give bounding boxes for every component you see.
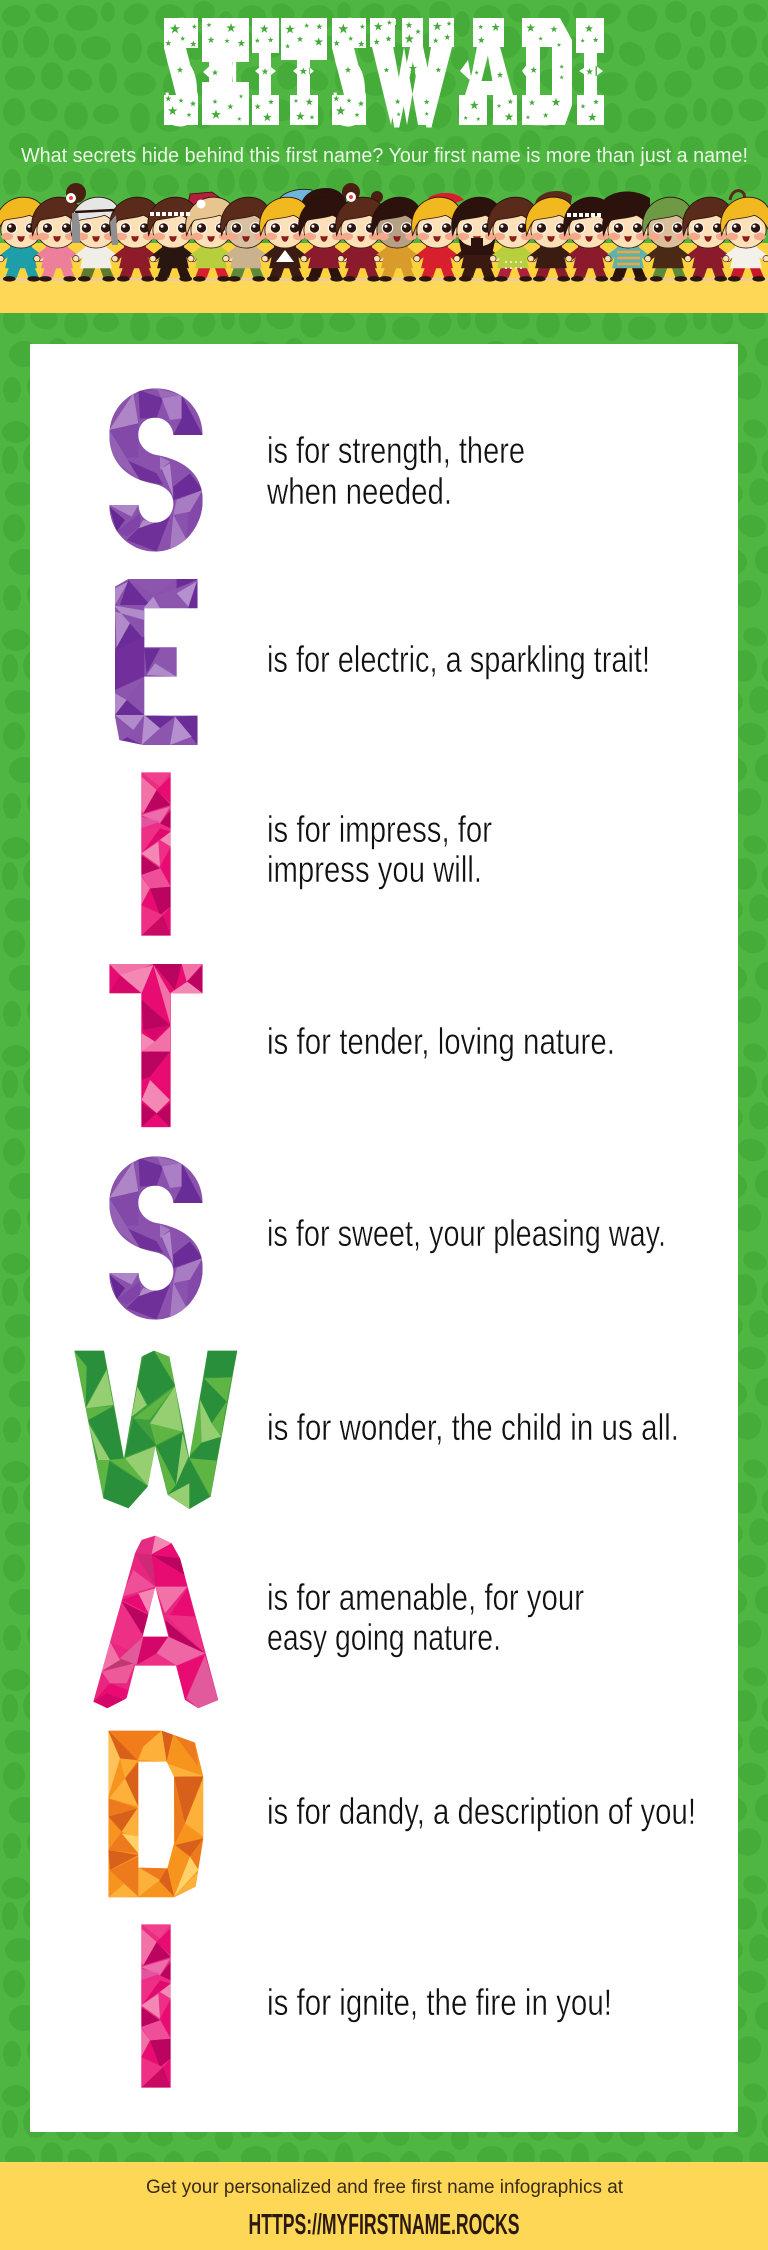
letter T: [107, 962, 205, 1130]
character extras behind heads: [66, 183, 746, 220]
panel: white letters card: [30, 344, 738, 2132]
text: I line: [267, 809, 492, 890]
banner: row of cartoon characters: [0, 183, 768, 282]
subtitle: What secrets hide behind this first name? Your first name is more than just a name!: [21, 145, 748, 167]
text: W line: is for wonder, the child in us all.: [267, 1407, 679, 1448]
text: E line: is for electric, a sparkling trait!: [267, 639, 650, 680]
text: second S line: is for sweet, your pleasing way.: [267, 1213, 666, 1254]
footer URL: HTTPS://MYFIRSTNAME.ROCKS: [248, 2209, 520, 2241]
text: A line: is for amenable, for your: [267, 1577, 584, 1618]
text: S line: when needed.: [266, 471, 452, 512]
letter D: [107, 1728, 205, 1898]
text: S line: [266, 430, 525, 512]
title: [162, 0, 604, 161]
letter A: [92, 1533, 220, 1710]
text: S line: is for strength, there: [267, 430, 525, 471]
letter S (second): [107, 1155, 205, 1321]
text: A line: [267, 1577, 584, 1658]
letter I (second): [140, 1922, 173, 2089]
text: I line: impress you will.: [267, 849, 482, 890]
text: A line: easy going nature.: [267, 1617, 501, 1658]
letter S: [107, 387, 205, 553]
character accessories: [66, 192, 640, 268]
footer band: [0, 2162, 768, 2250]
text: I line: is for impress, for: [267, 809, 492, 850]
footer text: Get your personalized and free first name infographics at: [146, 2177, 624, 2198]
letter W: [73, 1348, 238, 1510]
text: T line: is for tender, loving nature.: [267, 1021, 615, 1062]
letter E: [113, 577, 200, 747]
letter I: [140, 770, 173, 937]
banner: yellow band: [0, 243, 768, 313]
text: second I line: is for ignite, the fire in you!: [267, 1982, 612, 2023]
